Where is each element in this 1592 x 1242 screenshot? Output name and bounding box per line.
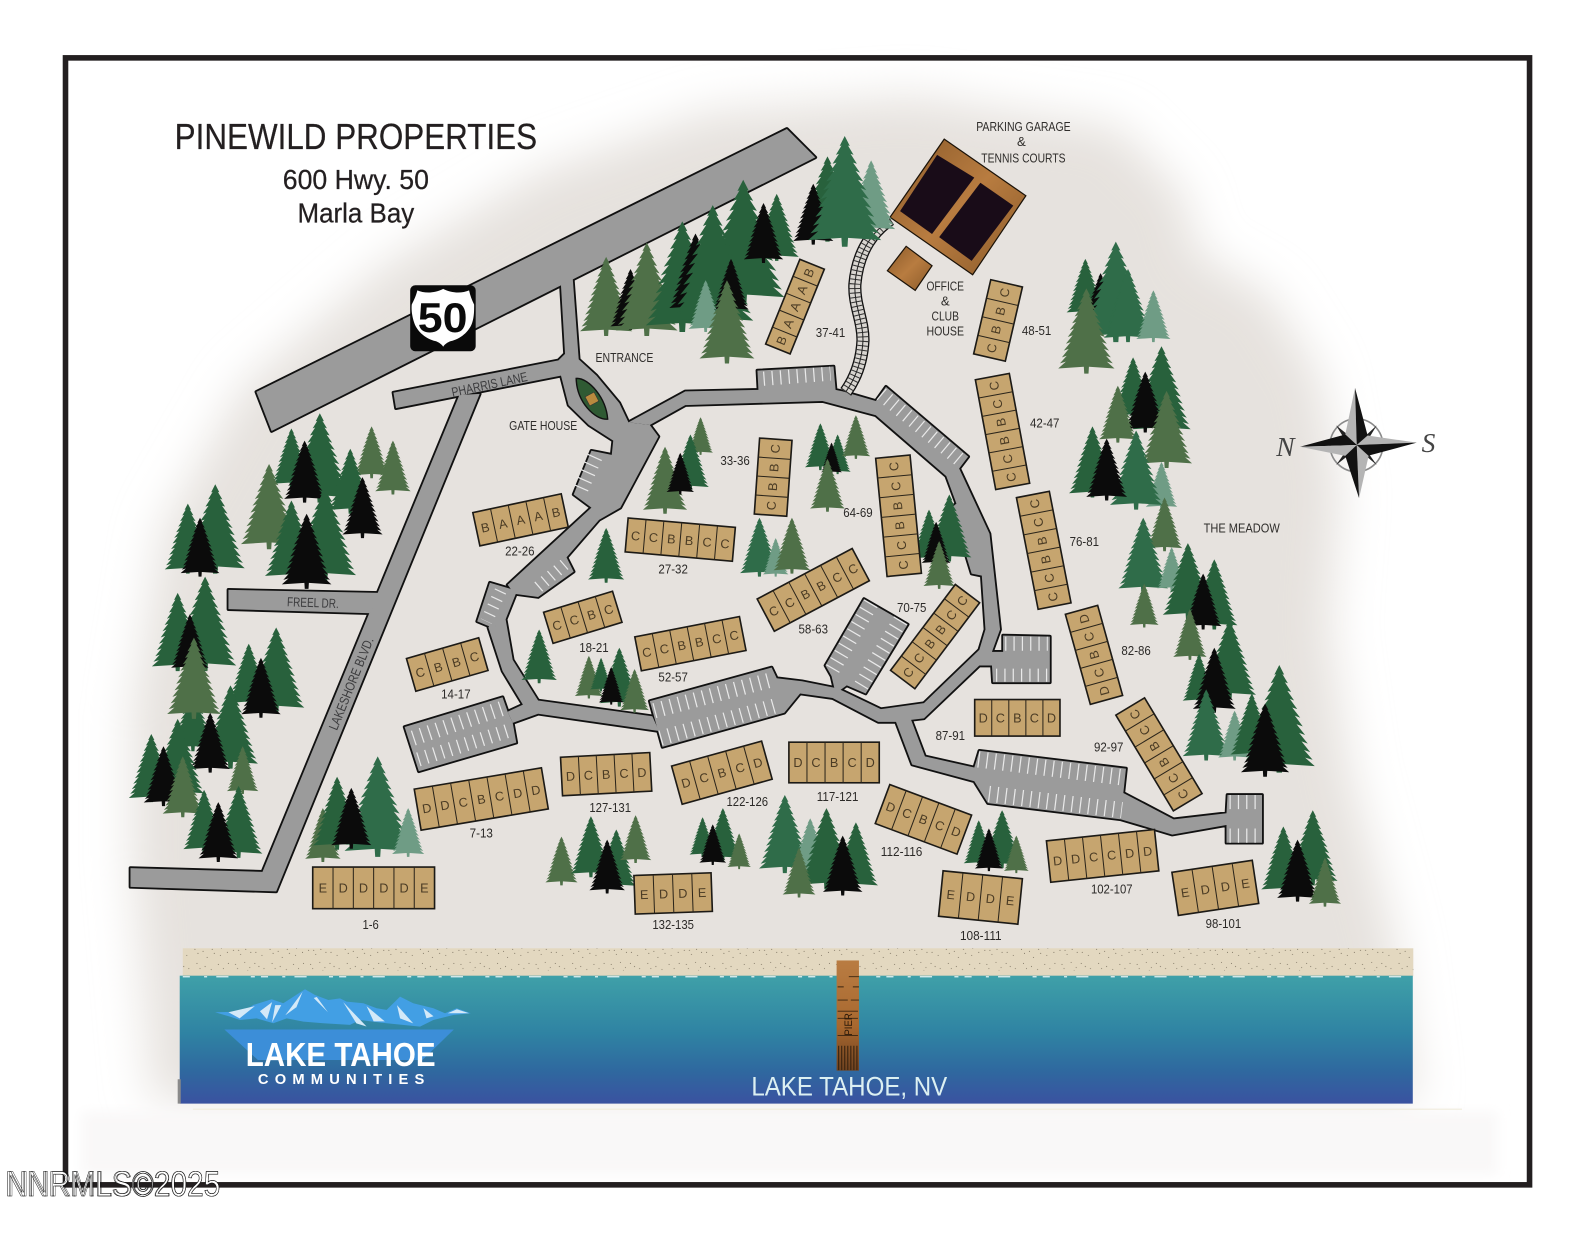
label: Lakeshore Blvd: LAKESHORE BLVD. <box>326 635 377 732</box>
road labels <box>287 369 529 732</box>
building 117-121: DCBCD <box>793 756 875 770</box>
unit number labels: 7-13 <box>470 826 493 841</box>
building 98-101 <box>1172 860 1259 915</box>
building 7-13 <box>414 768 548 830</box>
forest: east side <box>1058 242 1315 777</box>
building 64-69: CCBBCC <box>887 461 911 570</box>
forest: south groves <box>545 795 1341 907</box>
forest: left lower <box>129 577 304 862</box>
building 108-111: EDDE <box>946 888 1015 908</box>
label: parking garage and tennis courts: PARKING GARAGE <box>976 119 1071 134</box>
building 7-13: DDCBCDD <box>421 783 542 816</box>
building 102-107: DDCCDD <box>1052 844 1153 869</box>
building 37-41: BAAAB <box>774 266 817 347</box>
unit number labels: 33-36 <box>720 453 750 468</box>
unit number labels: 112-116 <box>881 844 922 859</box>
building 22-26: BAAAB <box>480 505 562 536</box>
building 52-57 <box>635 617 746 671</box>
label: office and club house: OFFICE <box>926 278 964 293</box>
building 92-97 <box>1116 698 1202 811</box>
label: office and club house <box>926 278 964 339</box>
lake <box>178 976 1462 1109</box>
unit number labels: 52-57 <box>658 669 688 684</box>
address: 600 Hwy. 50 <box>283 164 429 195</box>
unit number labels: 132-135 <box>652 917 694 932</box>
building 122-126: DCBCD <box>680 755 764 791</box>
lake label: LAKE TAHOE, NV <box>751 1071 948 1101</box>
label: the meadow: THE MEADOW <box>1204 521 1280 536</box>
label: entrance: ENTRANCE <box>595 350 654 365</box>
building 1-6: EDDDDE <box>319 881 429 895</box>
building 58-63: CCBBCC <box>767 561 860 620</box>
road network <box>130 129 1262 891</box>
building 112-116 <box>875 785 972 854</box>
unit number labels: 98-101 <box>1206 916 1241 931</box>
gate house island <box>576 378 608 419</box>
building 48-51: CBBC <box>984 287 1013 354</box>
building 42-47: CCBBCC <box>987 380 1019 483</box>
sub-wordmark: COMMUNITIES <box>258 1072 425 1088</box>
label: Freel Dr: FREEL DR. <box>287 594 339 611</box>
building 117-121 <box>789 742 879 783</box>
unit number labels: 87-91 <box>936 728 965 743</box>
place labels <box>509 119 1280 536</box>
locality: Marla Bay <box>297 197 415 228</box>
unit number labels: 117-121 <box>817 789 858 804</box>
building 122-126 <box>672 741 772 804</box>
building 22-26 <box>473 494 568 546</box>
label: office and club house: CLUB <box>932 308 959 323</box>
beach <box>183 948 1413 976</box>
building 58-63 <box>757 548 869 631</box>
unit number labels <box>362 323 1241 943</box>
building 48-51 <box>974 280 1022 361</box>
unit number labels: 82-86 <box>1121 643 1151 658</box>
building 102-107 <box>1046 830 1159 882</box>
building 82-86 <box>1065 605 1123 704</box>
building 132-135: EDDE <box>640 886 707 902</box>
office and club house <box>887 246 932 290</box>
label: parking garage and tennis courts: TENNIS COURTS <box>981 150 1066 165</box>
ribbon <box>224 1030 454 1060</box>
walkway to parking garage <box>846 219 890 392</box>
building 27-32 <box>625 518 735 561</box>
building 87-91: DCBCD <box>979 711 1056 725</box>
building 127-131: DCBCD <box>566 766 647 784</box>
building 52-57: CCBBCC <box>641 628 740 660</box>
label: office and club house: & <box>941 294 950 309</box>
building 76-81: CCBBCC <box>1027 498 1061 603</box>
compass rose <box>1275 388 1436 498</box>
unit number labels: 127-131 <box>589 800 631 815</box>
parking garage and tennis courts <box>890 139 1026 275</box>
building 27-32: CCBBCC <box>630 529 730 551</box>
building 37-41 <box>766 259 824 354</box>
building 33-36: CBBC <box>764 444 783 511</box>
logo: Lake Tahoe Communities <box>215 989 471 1088</box>
building 82-86: DCBCD <box>1077 612 1112 697</box>
building 127-131 <box>561 753 652 796</box>
mountains <box>215 989 471 1027</box>
forest: by building 1-6 <box>305 756 424 862</box>
unit number labels: 14-17 <box>441 687 471 702</box>
MLS watermark: NNRMLS©2025 <box>5 1164 220 1204</box>
building 18-21: CCBC <box>551 602 615 634</box>
unit number labels: 102-107 <box>1091 881 1133 896</box>
parking stripes <box>413 374 1260 836</box>
compass N: N <box>1275 432 1296 462</box>
forest: top centre <box>580 136 895 363</box>
label: parking garage and tennis courts: & <box>1017 134 1026 149</box>
map background wash <box>132 96 1416 1102</box>
MLS watermark: NNRMLS©2025 <box>7 1164 220 1204</box>
icon: US 50 shield <box>410 285 476 351</box>
building 112-116: DCBCD <box>884 799 963 840</box>
unit number labels: 37-41 <box>816 325 845 340</box>
icon: US 50 shield: 50 <box>418 294 468 341</box>
building 108-111 <box>939 871 1022 924</box>
building 18-21 <box>544 591 622 643</box>
title: PINEWILD PROPERTIES <box>175 116 537 157</box>
unit number labels: 70-75 <box>897 600 926 615</box>
building 33-36 <box>754 438 792 516</box>
building 64-69 <box>876 455 921 577</box>
building 92-97: CCBBCC <box>1127 707 1192 801</box>
unit number labels: 64-69 <box>843 505 873 520</box>
unit number labels: 18-21 <box>579 640 609 655</box>
unit number labels: 48-51 <box>1022 323 1051 338</box>
building 70-75 <box>891 584 980 689</box>
forest: interior groves <box>521 415 971 713</box>
building 98-101: EDDE <box>1180 876 1251 900</box>
label: Pharris Lane: PHARRIS LANE <box>450 369 529 400</box>
unit number labels: 1-6 <box>362 917 379 932</box>
unit number labels: 22-26 <box>505 543 535 558</box>
building 87-91 <box>975 700 1060 736</box>
label: parking garage and tennis courts <box>976 119 1071 165</box>
pale lower band <box>81 1112 1498 1175</box>
building 132-135 <box>634 873 712 914</box>
pier <box>837 960 859 1071</box>
pier label: PIER <box>843 1013 855 1036</box>
label: gate house: GATE HOUSE <box>509 418 577 433</box>
building 14-17 <box>406 638 488 691</box>
building 1-6 <box>313 867 435 909</box>
building 42-47 <box>975 373 1030 490</box>
building 76-81 <box>1016 491 1071 609</box>
unit number labels: 27-32 <box>658 562 688 577</box>
unit number labels: 92-97 <box>1094 739 1123 754</box>
building 14-17: CBBC <box>414 649 481 681</box>
unit number labels: 58-63 <box>799 622 828 637</box>
forest: left upper <box>165 413 411 589</box>
unit number labels: 76-81 <box>1070 534 1099 549</box>
unit number labels: 42-47 <box>1030 415 1059 430</box>
label: office and club house: HOUSE <box>926 324 964 339</box>
building 70-75: CCBBCC <box>900 593 971 681</box>
compass S: S <box>1422 428 1436 458</box>
unit number labels: 108-111 <box>960 928 1002 943</box>
wordmark: LAKE TAHOE <box>246 1037 436 1074</box>
unit number labels: 122-126 <box>726 794 768 809</box>
title block <box>175 116 537 228</box>
